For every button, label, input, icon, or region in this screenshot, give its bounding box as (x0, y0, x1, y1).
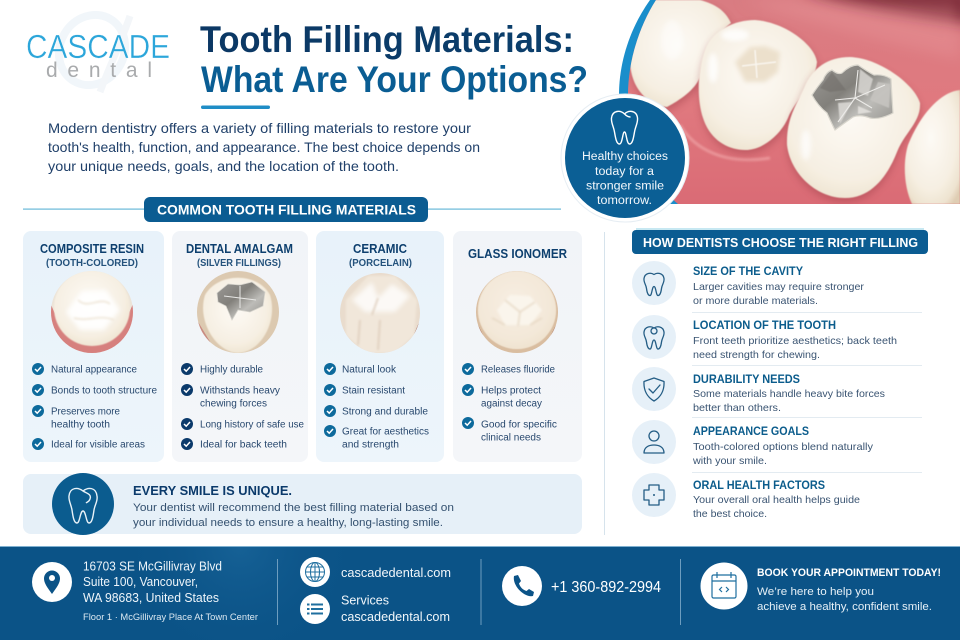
intro text: Modern dentistry offers a variety of filling materials to restore your (48, 120, 471, 136)
panel: ceramic (316, 231, 444, 462)
banner: every smile is unique: Your dentist will recommend the best filling material based on (133, 502, 454, 514)
banner: every smile is unique: your individual needs to ensure a healthy, long-lasting smile. (133, 517, 443, 529)
heading: common tooth filling materials: COMMON TOOTH FILLING MATERIALS (157, 202, 416, 218)
callout: healthy choices: tomorrow. (597, 195, 652, 207)
item: durability needs (632, 367, 885, 414)
image: amalgam tooth (197, 271, 279, 353)
panel: composite resin: COMPOSITE RESIN (40, 242, 144, 256)
feature list: Bonds to tooth structure (51, 386, 157, 396)
panel: dental amalgam (172, 231, 308, 462)
panel: composite resin: (TOOTH-COLORED) (46, 257, 138, 269)
panel: dental amalgam: (SILVER FILLINGS) (197, 257, 281, 269)
item: location of the tooth: need strength for chewing. (693, 349, 820, 361)
title (200, 19, 588, 109)
feature list: clinical needs (481, 432, 541, 444)
item: oral health factors: ORAL HEALTH FACTORS (693, 478, 825, 492)
feature list: Highly durable (200, 364, 263, 376)
item: appearance goals (632, 420, 874, 467)
heading: common tooth filling materials (23, 197, 561, 222)
image: ceramic tooth (340, 273, 420, 353)
address: 16703 SE McGillivray Blvd (83, 560, 222, 574)
title: What Are Your Options? (201, 59, 588, 100)
feature list: Great for aesthetics (342, 426, 429, 438)
feature list: Helps protect (481, 386, 541, 396)
item: location of the tooth: LOCATION OF THE TOOTH (693, 318, 836, 332)
website and services: cascadedental.com (341, 565, 451, 580)
panel: dental amalgam: DENTAL AMALGAM (186, 242, 293, 256)
website and services: cascadedental.com (341, 609, 450, 624)
intro text: your unique needs, goals, and the location of the tooth. (48, 158, 399, 174)
feature list: healthy tooth (51, 420, 110, 430)
call to action: We’re here to help you (757, 586, 874, 598)
banner: every smile is unique: EVERY SMILE IS UNIQUE. (133, 483, 292, 498)
feature list: chewing forces (200, 398, 267, 410)
item: durability needs: Some materials handle heavy bite forces (693, 388, 885, 400)
phone: +1 360-892-2994 (551, 579, 661, 596)
feature list: Good for specific (481, 420, 557, 430)
logo: Cascade Dental: dental (46, 59, 152, 82)
icon: tooth (69, 488, 97, 523)
feature list: Natural appearance (51, 364, 137, 376)
item: oral health factors: Your overall oral health helps guide (693, 494, 860, 506)
intro text (48, 120, 480, 174)
feature list: and strength (342, 440, 399, 450)
website and services (300, 557, 451, 624)
feature list (32, 363, 157, 450)
item: size of the cavity: SIZE OF THE CAVITY (693, 264, 803, 278)
hero photo: molar with silver filling (619, 0, 960, 204)
heading (632, 230, 928, 254)
item: size of the cavity: Larger cavities may require stronger (693, 281, 865, 293)
item: location of the tooth (632, 315, 897, 361)
feature list (181, 363, 304, 450)
feature list (462, 363, 557, 444)
callout: healthy choices: today for a (595, 166, 655, 178)
item: appearance goals: APPEARANCE GOALS (693, 424, 809, 438)
feature list: Ideal for visible areas (51, 440, 145, 450)
call to action: achieve a healthy, confident smile. (757, 601, 932, 613)
title: Tooth Filling Materials: (200, 19, 574, 60)
panel: ceramic: CERAMIC (353, 242, 407, 256)
feature list: Releases fluoride (481, 364, 555, 376)
panel: how dentists choose (604, 228, 928, 535)
feature list: Preserves more (51, 406, 120, 418)
item: size of the cavity (632, 261, 865, 307)
address: Suite 100, Vancouver, (83, 575, 198, 589)
footer (0, 546, 960, 640)
item: oral health factors: the best choice. (693, 508, 767, 520)
feature list: Natural look (342, 364, 397, 376)
item: size of the cavity: or more durable materials. (693, 295, 818, 307)
feature list: Strong and durable (342, 406, 428, 418)
feature list: Stain resistant (342, 386, 405, 396)
address (32, 560, 258, 623)
feature list: Long history of safe use (200, 420, 304, 430)
callout: healthy choices (561, 94, 689, 222)
callout: healthy choices: Healthy choices (582, 151, 668, 163)
item: durability needs: DURABILITY NEEDS (693, 372, 800, 386)
address: WA 98683, United States (83, 591, 219, 605)
logo: Cascade Dental: CASCADE (26, 28, 170, 65)
image: glass ionomer tooth (476, 271, 558, 353)
callout: healthy choices: stronger smile (586, 180, 664, 192)
panel: glass ionomer (453, 231, 582, 462)
item: location of the tooth: Front teeth prioritize aesthetics; back teeth (693, 335, 897, 347)
item: appearance goals: with your smile. (692, 455, 767, 467)
call to action: BOOK YOUR APPOINTMENT TODAY! (757, 567, 941, 579)
heading: HOW DENTISTS CHOOSE THE RIGHT FILLING (643, 235, 918, 250)
address: Floor 1 · McGillivray Place At Town Center (83, 612, 258, 623)
item: durability needs: better than others. (693, 402, 781, 414)
panel: glass ionomer: GLASS IONOMER (468, 247, 567, 261)
item: appearance goals: Tooth-colored options blend naturally (693, 441, 874, 453)
banner: every smile is unique (23, 473, 582, 535)
intro text: tooth's health, function, and appearance. The best choice depends on (48, 139, 480, 155)
panel: composite resin (23, 231, 164, 462)
icon: tooth (611, 111, 638, 144)
feature list: Withstands heavy (200, 386, 280, 396)
phone (502, 566, 661, 606)
image: composite tooth (50, 270, 134, 354)
panel: ceramic: (PORCELAIN) (349, 257, 412, 269)
website and services: Services (341, 592, 389, 608)
call to action (700, 562, 941, 613)
feature list: against decay (481, 398, 542, 410)
item: oral health factors (632, 473, 860, 520)
feature list (324, 363, 429, 450)
feature list: Ideal for back teeth (200, 440, 287, 450)
logo: Cascade Dental (26, 3, 170, 97)
